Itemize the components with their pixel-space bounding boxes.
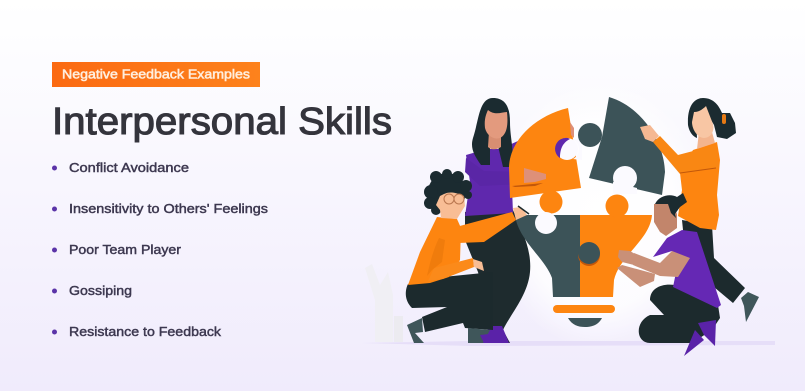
lower body bbox=[406, 272, 493, 332]
legs and shoe bbox=[682, 220, 745, 303]
head bbox=[654, 202, 677, 236]
hands bbox=[473, 259, 484, 271]
bulb bottom dome bbox=[568, 318, 602, 327]
arm bbox=[653, 136, 719, 174]
bullet: Resistance to Feedback: Resistance to Feedback bbox=[69, 324, 222, 339]
legs bbox=[639, 285, 720, 343]
hand woman in purple bbox=[524, 122, 574, 183]
shirt bbox=[653, 230, 721, 308]
hair bbox=[472, 98, 513, 167]
shoes bbox=[698, 320, 716, 346]
arm raised bbox=[456, 212, 516, 243]
neck and face bbox=[488, 132, 501, 149]
lightbulb lower: dark half bbox=[515, 215, 580, 297]
pen bbox=[518, 206, 529, 214]
curly hair bbox=[424, 169, 472, 215]
shoes bbox=[407, 318, 424, 343]
hand bbox=[640, 125, 659, 142]
torso bbox=[408, 217, 461, 285]
woman in purple bbox=[465, 98, 525, 216]
lightbulb lower: orange half bbox=[580, 194, 652, 297]
bullet: Conflict Avoidance: Conflict Avoidance bbox=[69, 160, 189, 175]
bullet: Insensitivity to Others' Feelings: Insensitivity to Others' Feelings bbox=[69, 201, 269, 216]
bullet list bbox=[52, 160, 269, 339]
bullet: Poor Team Player: Poor Team Player bbox=[69, 242, 182, 257]
plant vase bbox=[365, 264, 403, 342]
purple shoe bbox=[480, 326, 509, 343]
near arm bbox=[633, 251, 690, 277]
body bbox=[678, 142, 720, 230]
crouching man in purple bbox=[617, 193, 721, 356]
illustration: team assembling a lightbulb puzzle bbox=[362, 80, 775, 356]
hair tie bbox=[722, 114, 726, 124]
woman in purple legs bbox=[465, 208, 530, 343]
far arm bbox=[617, 265, 655, 287]
bullet: Gossiping: Gossiping bbox=[69, 283, 132, 298]
arm sleeve woman in purple bbox=[465, 158, 524, 186]
fist bbox=[618, 250, 635, 265]
head bbox=[436, 193, 465, 219]
puzzle piece: orange top-left bbox=[509, 108, 582, 214]
hair and topknot bbox=[655, 193, 687, 218]
badge: Negative Feedback Examples: Negative Feedback Examples bbox=[62, 66, 251, 82]
curly-haired man bbox=[406, 169, 529, 343]
torso bbox=[465, 141, 525, 216]
woman in orange bbox=[640, 98, 759, 322]
puzzle knob and holes bbox=[535, 212, 557, 234]
hair bbox=[688, 98, 736, 139]
bulb base bar bbox=[553, 305, 615, 313]
glow behind puzzle bbox=[490, 80, 710, 350]
badge: Negative Feedback Examples bbox=[52, 62, 260, 87]
puzzle piece: dark top-right bbox=[578, 97, 665, 195]
title: Interpersonal Skills bbox=[52, 101, 392, 143]
neck and face bbox=[697, 132, 715, 149]
glasses bbox=[444, 194, 464, 204]
floor shadow bbox=[362, 341, 775, 346]
notch bbox=[556, 138, 578, 160]
arm lower bbox=[428, 258, 474, 281]
